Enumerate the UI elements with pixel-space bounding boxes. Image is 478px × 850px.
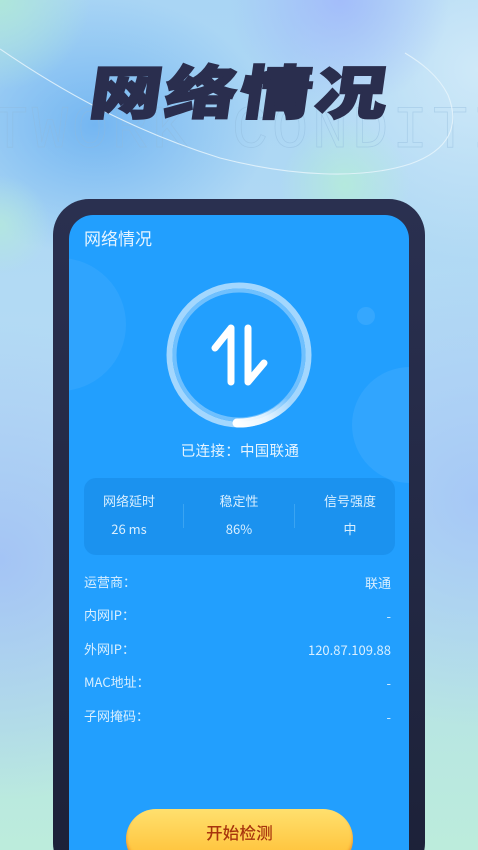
decorative circle left [0, 258, 126, 391]
title: 网络情况 [85, 46, 397, 130]
decorative circle right [352, 367, 468, 483]
stat: stability: 86% [226, 519, 252, 538]
start button [126, 809, 353, 850]
stat: signal: 中 [343, 519, 356, 538]
row: WAN IP: 外网IP： [84, 639, 135, 658]
progress ring with arrows [166, 282, 312, 428]
row: MAC: MAC地址： [84, 672, 150, 691]
row: LAN IP: 内网IP： [84, 605, 135, 624]
row: carrier: 运营商： [84, 572, 136, 591]
stat: stability [219, 491, 258, 538]
ring highlight arc [237, 403, 287, 423]
phone screen [69, 215, 409, 850]
phone frame [53, 199, 425, 850]
row: subnet [84, 706, 391, 726]
row: WAN IP [84, 639, 391, 659]
stat: stability: 稳定性 [219, 491, 258, 510]
button label: 开始检测 [206, 820, 273, 844]
ring inner shade [174, 290, 304, 420]
screen title: 网络情况 [84, 225, 152, 250]
stat: signal [324, 491, 376, 538]
row: carrier [84, 572, 391, 592]
row: LAN IP: - [386, 606, 391, 625]
swoosh line [0, 49, 453, 174]
row: carrier: 联通 [365, 573, 391, 592]
stat: latency: 26 ms [111, 519, 147, 538]
row: LAN IP [84, 605, 391, 625]
row: WAN IP: 120.87.109.88 [308, 640, 391, 659]
row: subnet: 子网掩码： [84, 706, 149, 725]
stat: latency [103, 491, 155, 538]
stats panel [84, 478, 395, 555]
stat: signal: 信号强度 [324, 491, 376, 510]
row: MAC [84, 672, 391, 692]
decorative circle small [357, 307, 375, 325]
row: subnet: - [386, 707, 391, 726]
connection status: 已连接：中国联通 [181, 440, 299, 461]
icon: up and down arrows [215, 328, 264, 382]
row: MAC: - [386, 673, 391, 692]
stat: latency: 网络延时 [103, 491, 155, 510]
ring track [170, 286, 308, 424]
info rows [84, 572, 391, 726]
decorative background lettering and swoosh [0, 48, 478, 175]
